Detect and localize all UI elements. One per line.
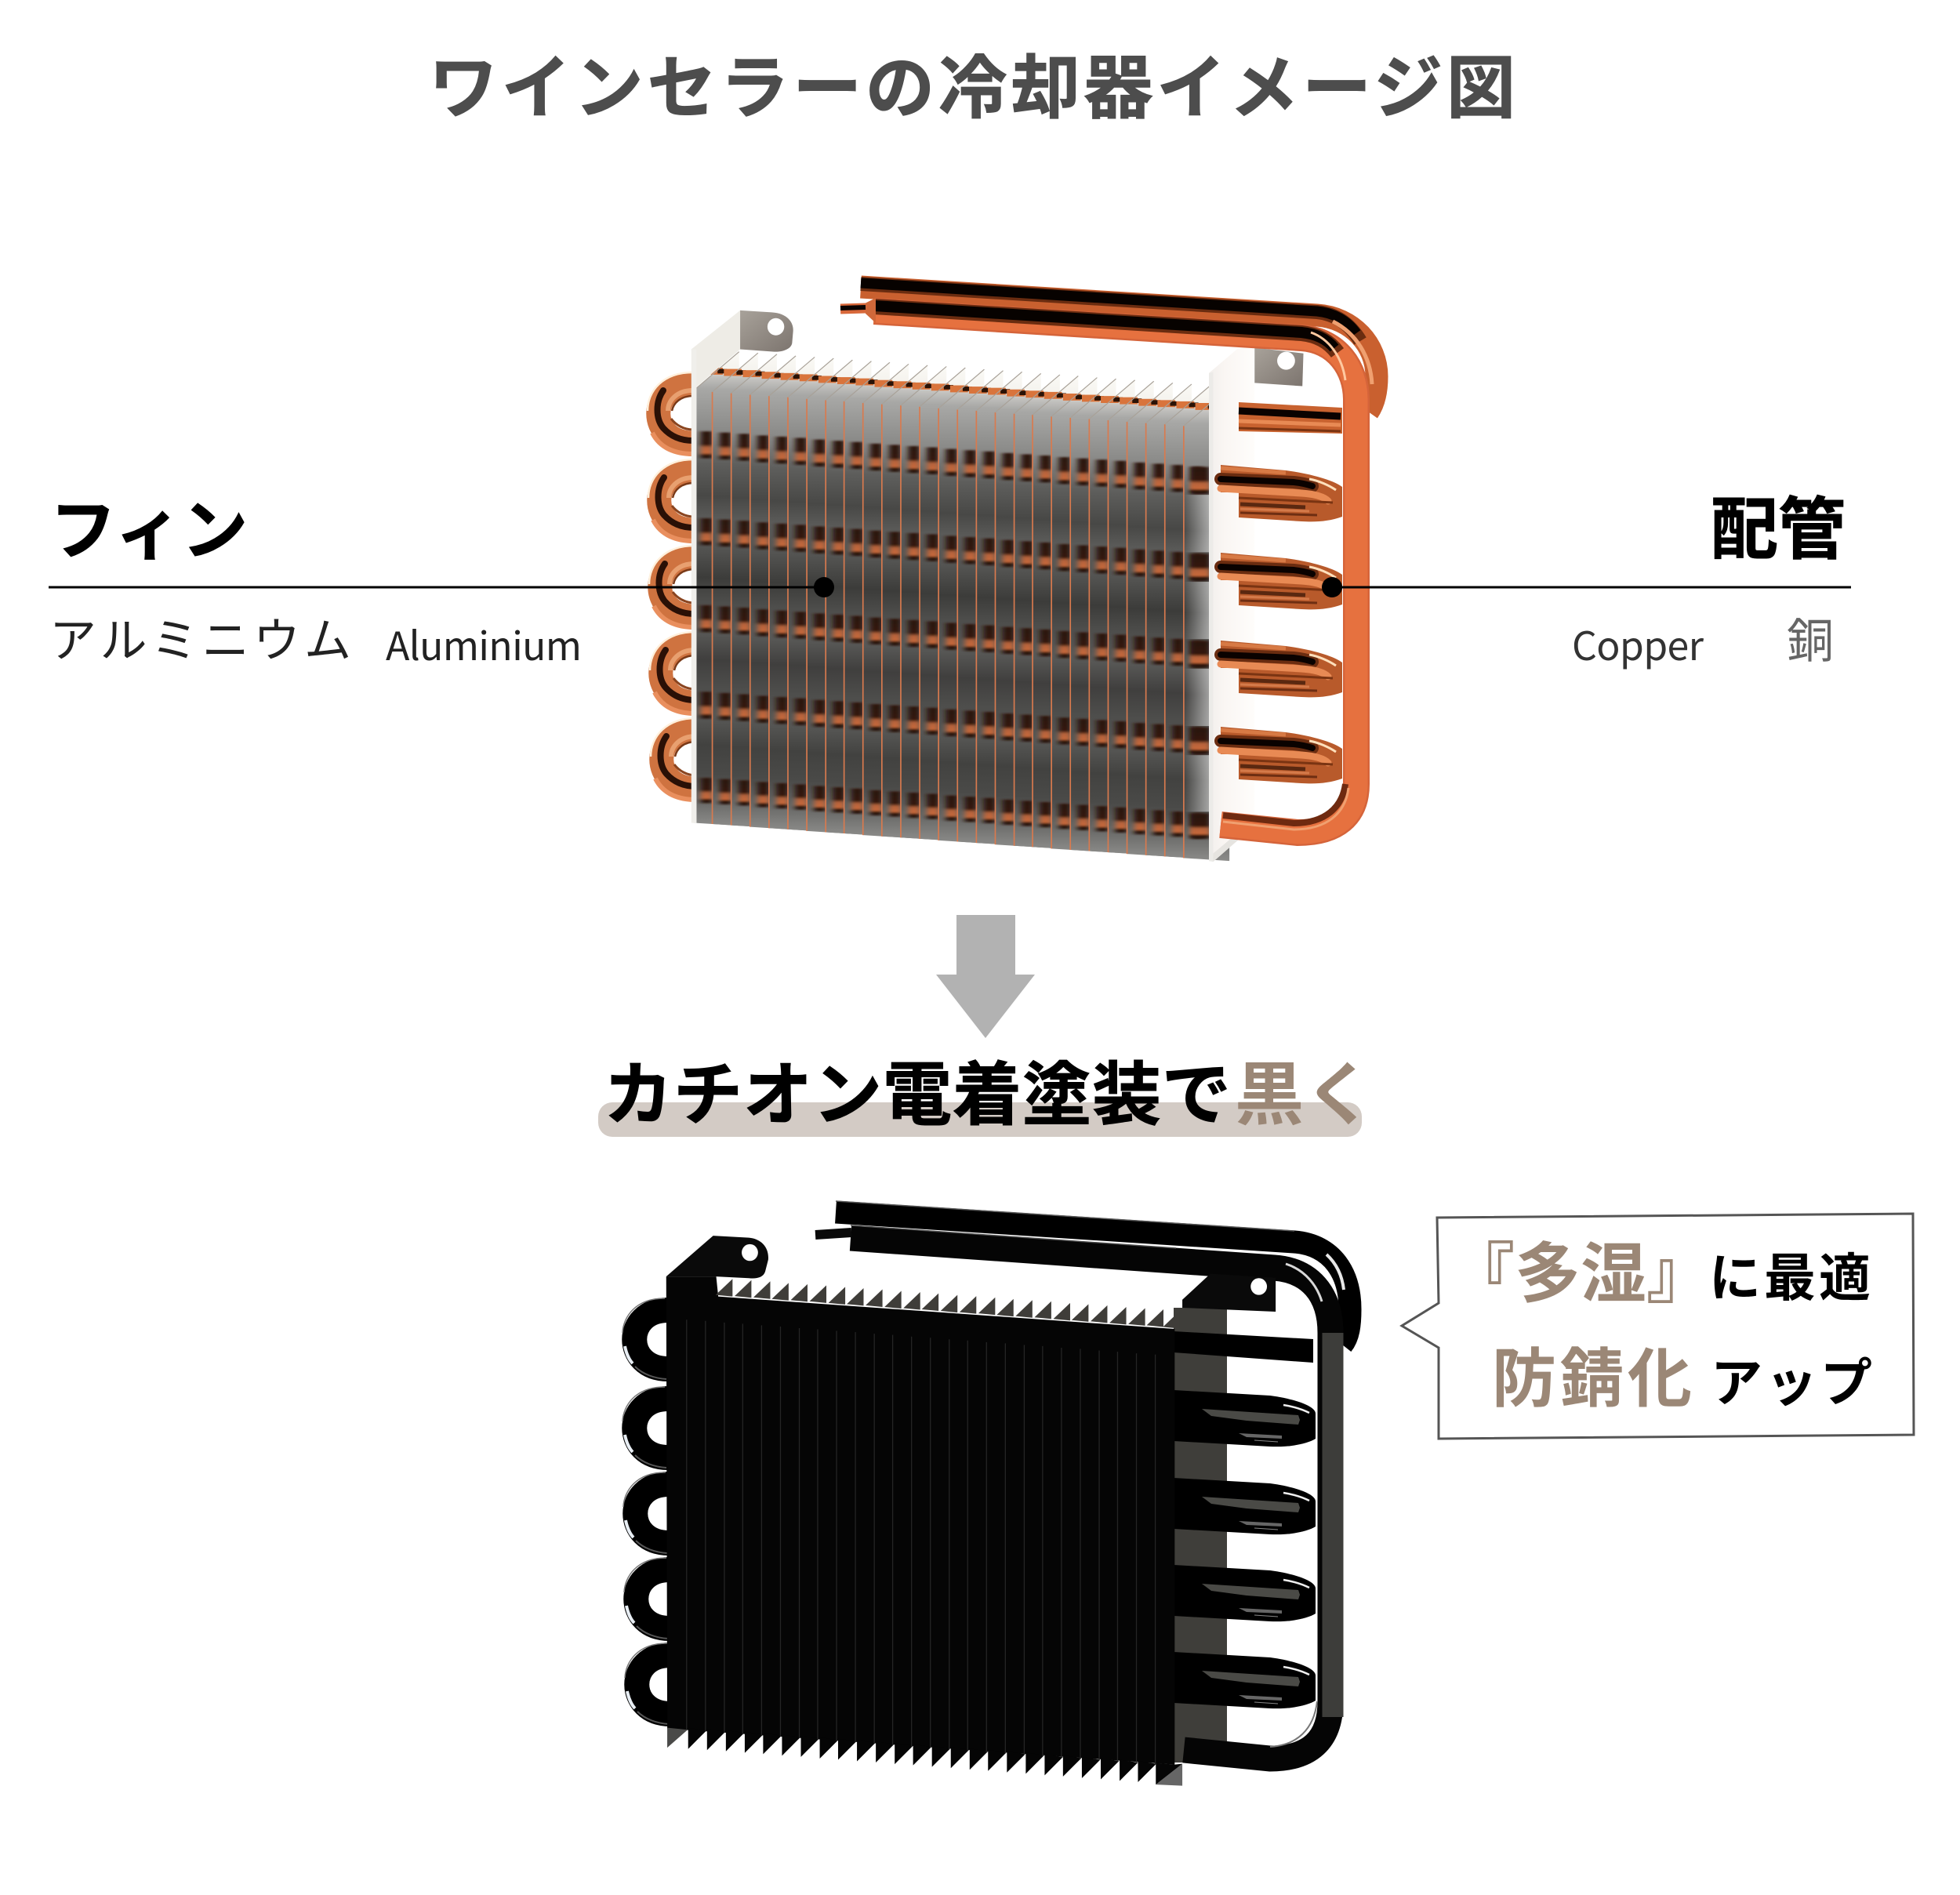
subheading: cationic electrodeposition: 黒く bbox=[1235, 1040, 1374, 1139]
illustration: aluminium fin block bbox=[691, 310, 1304, 862]
copper back return tube bbox=[861, 283, 1377, 412]
label: piping bbox=[1572, 474, 1846, 672]
subheading: cationic electrodeposition: カチオン電着塗装で bbox=[604, 1040, 1231, 1139]
callout line 1: 『多湿』 bbox=[1449, 1222, 1712, 1316]
black coated left bends bbox=[622, 1298, 670, 1724]
label: piping: 配管 bbox=[1711, 474, 1846, 572]
bottom fin teeth bbox=[688, 1728, 1156, 1782]
leader line: piping bbox=[1322, 577, 1851, 597]
coated fin block bbox=[666, 1276, 1182, 1786]
right mounting tab bbox=[1254, 347, 1304, 387]
label: fin: Aluminium bbox=[386, 615, 582, 672]
aluminium fins bbox=[693, 352, 1229, 861]
arrow: down bbox=[936, 915, 1035, 1038]
top fin edges bbox=[716, 1279, 1180, 1328]
illustration: black coated fin block bbox=[666, 1236, 1276, 1786]
callout line 2: 防錆化 bbox=[1492, 1327, 1692, 1420]
last bay tube stubs bbox=[1192, 467, 1210, 839]
label: fin bbox=[49, 478, 582, 672]
black coated back tube bbox=[836, 1201, 1350, 1345]
right mounting tab bbox=[1182, 1274, 1276, 1312]
black coated hairpins bbox=[1174, 1331, 1316, 1708]
capillary stub black bbox=[815, 1232, 851, 1235]
right hairpin bends bbox=[1221, 402, 1342, 783]
title: ワインセラーの冷却器イメージ図 bbox=[429, 33, 1515, 133]
left mounting tab bbox=[740, 310, 793, 352]
label: fin: フィン bbox=[50, 478, 248, 573]
label: piping: 銅 bbox=[1787, 604, 1834, 672]
capillary stub bbox=[840, 298, 876, 323]
fin lines bbox=[687, 1320, 1156, 1765]
callout line 1 bbox=[1449, 1222, 1871, 1316]
callout line 1: に最適 bbox=[1709, 1236, 1871, 1312]
left return bends bbox=[648, 372, 696, 800]
left mounting tab bbox=[666, 1236, 768, 1278]
subheading highlight bar bbox=[598, 1102, 1362, 1137]
black coated front tube bbox=[851, 1225, 1333, 1759]
fin light falloff bbox=[1184, 495, 1209, 811]
callout line 2: アップ bbox=[1711, 1341, 1872, 1417]
leader line: fin bbox=[49, 577, 834, 597]
copper front supply tube bbox=[874, 306, 1356, 833]
right end plate bbox=[1209, 347, 1254, 862]
black plate translucent strip bbox=[1174, 1308, 1227, 1762]
callout bubble bbox=[1402, 1214, 1914, 1439]
callout line 2 bbox=[1492, 1327, 1872, 1420]
label: piping: Copper bbox=[1572, 615, 1704, 672]
left end plate bbox=[691, 310, 740, 823]
label: fin: アルミニウム bbox=[49, 603, 351, 671]
